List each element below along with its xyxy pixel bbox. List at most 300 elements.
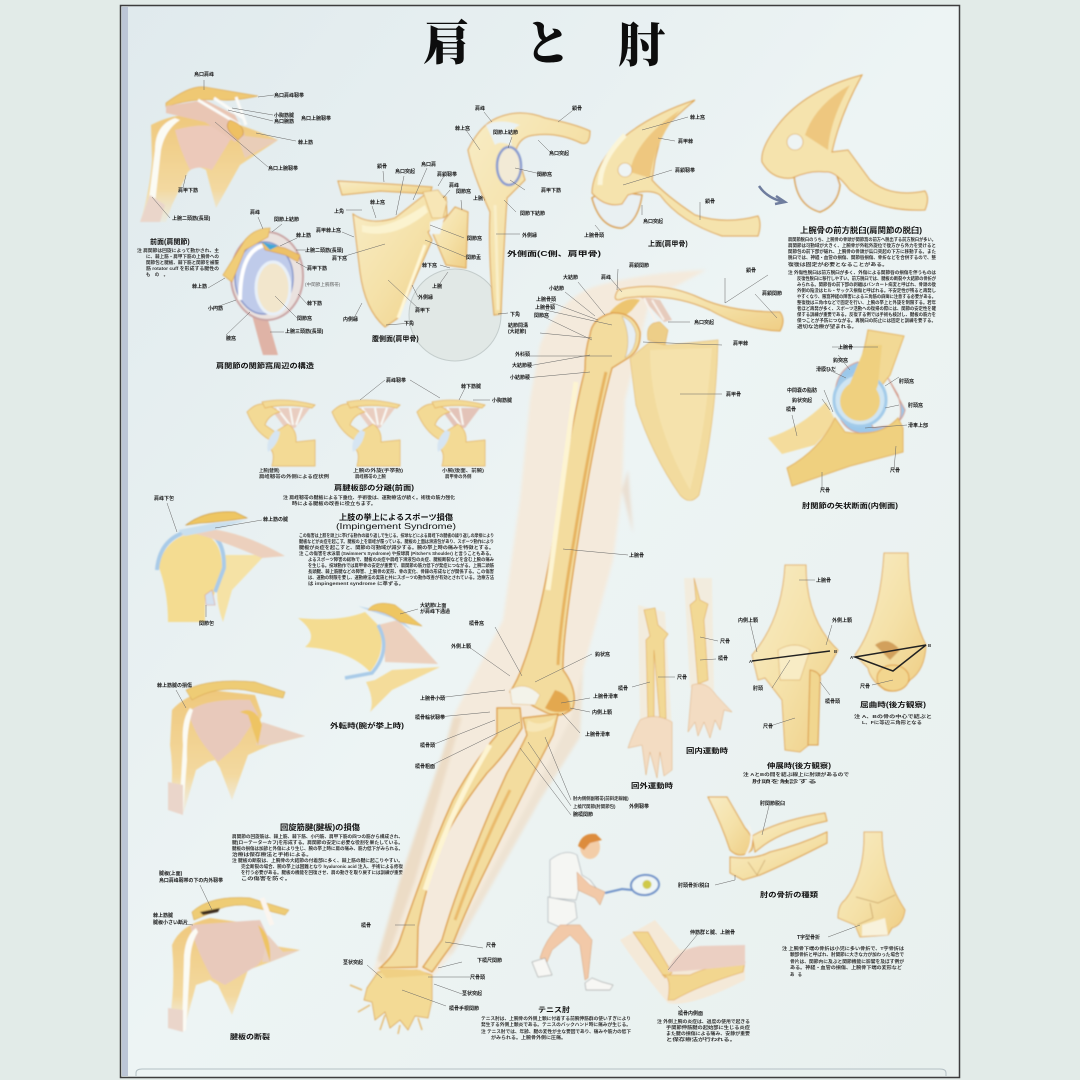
labels: 内側縁 — [343, 316, 358, 323]
leaders — [167, 503, 262, 617]
title: と — [524, 19, 571, 71]
paragraph: やすくなり、腋窩神経の障害による三角筋の麻痺に注意する必要がある。 — [797, 293, 936, 300]
paragraph: 腱板の損傷は加齢と外傷により生じ、腕の挙上時に肩の痛み、筋力低下がみられる。 — [232, 845, 403, 852]
labels: 外側靱帯 — [629, 803, 649, 810]
labels — [192, 209, 344, 342]
paragraph: 脱臼では、神経・血管の損傷、関節唇損傷、骨折などを合併するので、整 — [788, 254, 937, 261]
caption: 屈曲時(後方観察) — [860, 700, 926, 709]
note: 骨片は、関節内に及ぶと関節機能に影響を及ぼす例が — [790, 958, 905, 965]
forearm illustration — [628, 605, 672, 778]
paragraph: 長頭腱、棘上筋腱などの障害、上腕骨の変形、骨の変化、骨棘の形成などが関係する。この傷害 — [308, 568, 495, 575]
panel: tennis elbow — [620, 920, 751, 1043]
radius and ulna — [380, 708, 558, 972]
labels: 外側上顆 — [832, 617, 852, 624]
labels: 鎖骨 — [705, 198, 715, 205]
paragraph: 注 この傷害を水泳肩 (Swimmer's Syndrome) や投球肩 (Pitcher's Shoulder) と言うこともある。 — [299, 550, 494, 557]
note: ある — [790, 972, 802, 977]
paragraph: この傷害は上肢を頭上に挙げる動作の繰り返しで生じる。投球などによる肩峰下の腱板の繰り返しの摩擦により — [299, 532, 494, 539]
labels: 尺骨 — [820, 487, 830, 494]
labels: 肩鎖靱帯 — [437, 171, 457, 178]
labels — [153, 870, 223, 926]
labels — [172, 71, 331, 222]
labels: 尺骨 — [677, 674, 687, 681]
note: 注 AとBの間を結ぶ線上に肘頭があるので — [743, 771, 850, 778]
note — [657, 1018, 751, 1043]
labels: 内側上顆 — [592, 709, 612, 716]
labels: 肩峰靱帯の上腕 — [355, 473, 386, 480]
paragraph — [232, 833, 404, 882]
labels: 肩峰下包 — [154, 495, 174, 502]
leaders — [208, 217, 307, 335]
labels: 小胸筋腱 — [274, 112, 294, 119]
labels: 烏口上腕靱帯 — [268, 165, 298, 172]
subheading: (Impingement Syndrome) — [336, 522, 457, 531]
forearm illustration — [684, 578, 732, 738]
labels: 肩鎖関節 — [629, 262, 649, 269]
labels — [316, 161, 488, 327]
section illustration — [298, 603, 440, 712]
labels: 橈骨頭 — [420, 742, 435, 749]
paragraph: 注 外傷性脱臼は前方脱臼が多く、外傷による関節唇の損傷を伴うものは — [788, 269, 937, 276]
paragraph: 適切な治療が望まれる。 — [797, 323, 857, 330]
panel: main arm skeleton — [343, 262, 783, 1034]
labels: 棘上筋 — [192, 283, 207, 290]
panel: distal humerus fracture — [782, 832, 905, 977]
labels: 肩峰靱帯 — [386, 377, 406, 384]
labels: 腱板小さい断片 — [153, 919, 188, 926]
title: 肘 — [618, 21, 665, 73]
labels: 腋窩 — [226, 335, 236, 342]
labels: 肩甲骨の外側 — [445, 473, 472, 480]
labels: 橈骨 — [618, 685, 628, 692]
paragraph: よるスポーツ障害の総称で、腱板の炎症や肩峰下滑液包の炎症、腱板断裂などを含む上腕の痛み — [308, 556, 495, 563]
labels: A — [749, 659, 753, 664]
labels: 上腕骨頭 — [536, 296, 556, 303]
line — [752, 651, 830, 661]
note: 注 肩峰靱帯の腱板による下垂位、手術後は、運動療法が続く。術後の筋力強化 — [283, 494, 456, 501]
shoulder 2 — [332, 400, 400, 466]
note: と保存療法が行われる。 — [666, 1036, 736, 1043]
humerus illustration — [838, 832, 905, 937]
clavicle — [615, 286, 783, 331]
elbow illustration — [855, 553, 926, 691]
panel: elbow posterior extended — [738, 565, 852, 785]
panel: supination forearm — [618, 605, 687, 790]
labels: 烏口肩峰靱帯の下の内外靱帯 — [159, 877, 223, 884]
panel: shoulder section — [154, 495, 288, 627]
leaders — [360, 380, 490, 400]
leaders — [367, 269, 777, 1006]
labels: 上腕骨頸 — [535, 304, 555, 311]
lateral scapula illustration — [468, 113, 590, 315]
labels: 外側縁 — [418, 294, 433, 301]
note: 肘頭を触診する — [752, 778, 817, 785]
labels: 烏口腕筋 — [274, 118, 294, 125]
translucent circle — [409, 269, 501, 361]
panel: elbow sagittal section — [768, 330, 928, 510]
labels: 棘下筋腱 — [461, 383, 481, 390]
arm silhouette — [372, 270, 706, 980]
labels: 橈骨手根関節 — [449, 1005, 479, 1012]
note: 時による腱板の改善に役立ちます。 — [292, 500, 376, 507]
labels: 肩峰 — [250, 209, 260, 216]
labels: 下角 — [404, 320, 414, 327]
leaders — [750, 580, 832, 726]
labels: 小結節 — [549, 285, 564, 292]
labels: 肘内側側副靱帯(前斜走線維) — [573, 795, 629, 802]
labels: 上腕二頭筋(長頭) — [305, 247, 344, 254]
labels: A — [850, 655, 854, 660]
labels: 上腕骨 — [838, 344, 853, 351]
leaders — [668, 935, 697, 1010]
label: T字型骨折 — [797, 934, 820, 941]
note: 注 外側上腕の炎症は、過度の使用で起きる — [657, 1018, 750, 1025]
labels: 棘上筋の腱 — [263, 516, 288, 523]
labels: 肘頭骨折/脱臼 — [678, 882, 709, 889]
labels: 上腕骨 — [816, 577, 831, 584]
paragraph: 外側の陥没はヒル・サックス損傷と呼ばれる。不安定性が残ると再発し — [797, 287, 937, 294]
panel: scapula anterior view — [316, 161, 488, 343]
labels: 肩峰靱帯の外側による症状例 — [259, 473, 330, 480]
panel: shoulder front view — [137, 71, 331, 278]
labels: 烏口上腕靱帯 — [301, 115, 331, 122]
labels: 肘頭 — [753, 685, 763, 692]
labels: 烏口肩 — [421, 161, 436, 168]
caption: 上面(肩甲骨) — [648, 239, 688, 248]
labels: 下橈尺関節 — [477, 957, 502, 964]
labels: 烏口肩峰 — [194, 71, 214, 78]
labels: 関節上結節 — [274, 216, 299, 223]
paragraph: 腱板が炎症を起こすと、関節の可動域が減少する。腕の挙上時の痛みを特徴とする。 — [299, 544, 494, 551]
paragraph: 保つことが予防につながる。再脱臼の防止には固定と訓練を要する。 — [797, 317, 936, 324]
labels: 肩甲棘 — [678, 138, 693, 145]
labels: 肘関節脱臼 — [760, 800, 785, 807]
labels: 大結節/上面 — [420, 602, 446, 609]
labels: 腕橈関節 — [573, 811, 593, 818]
note: ある。神経・血管の損傷、上腕骨下端の変形など — [790, 964, 903, 971]
leaders — [595, 117, 700, 231]
labels: 伸筋群と腱、上腕骨 — [690, 929, 735, 936]
labels: 中間嚢の脂肪 — [787, 387, 817, 394]
elbow illustration — [708, 797, 827, 880]
paragraph: みられる。関節唇の前下部の剥離はバンカート病変と呼ばれ、骨頭の後 — [797, 281, 937, 288]
labels: 結節間溝 — [508, 322, 528, 329]
note: 注 上腕骨下端の骨折は小児に多い骨折で、T字骨折は — [782, 945, 905, 952]
illustration — [762, 75, 928, 212]
panel: shoulder mid left — [157, 681, 305, 815]
title — [423, 18, 665, 73]
panel: dislocated shoulder top view — [759, 75, 928, 212]
icon: arrow — [759, 186, 785, 204]
top view illustration — [592, 100, 760, 236]
labels: 棘上窩 — [690, 114, 705, 121]
labels: 茎状突起 — [462, 990, 482, 997]
shoulder illustration — [140, 87, 278, 222]
note: 注 A、Bの骨の中心で結ぶと — [854, 713, 932, 720]
paragraph: を生じる。投球動作では肩甲骨の安定が重要で、肩関節の筋力低下が発症につながる。上腕二頭筋 — [308, 562, 495, 569]
labels: 烏口肩峰靱帯 — [274, 92, 304, 99]
paragraph: 注 腱板の断裂は、上腕骨の大結節の付着部に多く、棘上筋の腱に起こりやすい。 — [232, 857, 403, 864]
labels: 肩甲下筋 — [541, 187, 561, 194]
labels — [259, 377, 512, 480]
caption: テニス肘 — [538, 1005, 570, 1014]
caption: 腹側面(肩甲骨) — [372, 334, 419, 343]
labels: 肘頭窩 — [908, 402, 923, 409]
paragraph: 反復性脱臼に移行しやすい。前方脱臼では、腱板の断裂や大結節の骨折が — [797, 275, 937, 282]
labels: 肩下窩 — [332, 255, 347, 262]
labels: 小結節稜 — [510, 374, 530, 381]
labels: 肩甲棘 — [733, 340, 748, 347]
labels: 橈骨 — [361, 922, 371, 929]
labels — [584, 114, 715, 239]
labels: 肩甲骨 — [726, 391, 741, 398]
labels: 尺骨 — [860, 683, 870, 690]
labels — [678, 800, 785, 889]
caption: 外転時(腕が挙上時) — [330, 721, 404, 730]
labels — [678, 929, 735, 1017]
glenoid illustration — [223, 228, 303, 355]
labels: 棘上窩 — [455, 125, 470, 132]
note: また腱の損傷による痛み、安静が重要 — [666, 1030, 751, 1037]
labels: 肩甲下 — [415, 308, 430, 314]
labels: 上腕骨 — [473, 195, 488, 202]
title: 肩 — [423, 18, 470, 71]
labels: 内側上顆 — [738, 617, 758, 624]
note: 関節包と腱板、棘下筋と関節を被覆 — [146, 259, 220, 266]
panel: scapula lateral view — [455, 105, 601, 318]
labels: 関節上結節 — [493, 129, 518, 136]
leader — [828, 925, 860, 937]
caption: 肩関節の関節窩周辺の構造 — [216, 361, 314, 370]
paragraph: は impingement syndrome に準ずる。 — [308, 580, 404, 587]
labels: 橈骨輪状靱帯 — [415, 714, 445, 721]
labels: 上腕二頭筋(長頭) — [172, 215, 211, 222]
paragraph: 復後は固定が必要となることがある。 — [788, 261, 888, 268]
note: もの。 — [146, 271, 168, 278]
wrist and carpals — [350, 968, 432, 1034]
labels: 肩甲下筋 — [307, 265, 327, 272]
icon: tennis player — [532, 834, 660, 990]
labels: 烏口突起 — [549, 150, 569, 157]
paragraph: この傷害を防ぐ。 — [241, 875, 291, 882]
labels: 関節包 — [199, 620, 214, 627]
section illustration — [768, 330, 905, 486]
labels: 上腕骨滑車 — [593, 693, 618, 700]
labels: 鈎突窩 — [833, 357, 848, 364]
labels: 肩峰 — [475, 105, 485, 112]
note: 筋 rotator cuff を形成する腱性の — [146, 265, 220, 272]
caption: 肘の骨折の種類 — [760, 890, 818, 899]
note: L、Fに等辺三角形となる — [862, 719, 922, 726]
labels: が肩峰下通過 — [420, 608, 450, 615]
labels: 大結節 — [563, 274, 578, 281]
paragraph: 腱板などが炎症を起こす。腱板の上を肩峰が覆っている。腱板の上面は滑液包があり、スポーツ動作により — [299, 538, 494, 545]
labels: 関節窩 — [534, 312, 549, 319]
labels: 棘上窩 — [370, 199, 385, 206]
labels: 滑車上部 — [908, 422, 928, 429]
panel: three shoulder diagrams — [247, 377, 512, 507]
shoulder 1 — [247, 400, 315, 466]
paragraph: 肩関節脱臼のうち、上腕骨の骨頭が関節窩の前方へ脱出する前方脱臼が多い。 — [788, 236, 936, 243]
labels: B — [928, 643, 931, 648]
panel: elbow fracture — [678, 797, 827, 899]
labels: 肩甲下筋 — [178, 187, 198, 194]
labels: 外科頸 — [515, 351, 530, 358]
panel: elbow posterior flexed — [850, 553, 932, 726]
text block: impingement syndrome — [299, 512, 495, 587]
labels: 橈骨 — [718, 655, 728, 662]
labels: 尺骨 — [720, 638, 730, 645]
labels: 上腕(健側) — [259, 467, 280, 474]
scapula illustration — [338, 181, 468, 327]
illustration — [168, 898, 300, 1032]
labels: 小円筋 — [208, 305, 223, 312]
labels: 烏口突起 — [395, 168, 415, 175]
labels: 橈骨内側面 — [678, 1010, 703, 1017]
labels: 外側縁 — [522, 232, 537, 239]
labels: 関節下結節 — [520, 210, 545, 217]
labels: 烏口突起 — [643, 218, 663, 225]
labels — [420, 602, 450, 615]
labels: 上腕骨 — [629, 552, 644, 559]
paragraph — [788, 236, 937, 330]
labels: 棘上筋 — [298, 139, 313, 146]
labels: 肩鎖関節 — [762, 290, 782, 297]
heading: 上腕骨の前方脱臼(肩関節の脱臼) — [800, 225, 922, 235]
caption: 肘関節の矢状断面(内側面) — [802, 501, 898, 510]
paragraph — [299, 532, 495, 587]
paragraph: 保する訓練が重要である。反復する例では手術も検討し、腱板の筋力を — [797, 311, 936, 318]
leaders — [152, 80, 296, 218]
labels: 腱板(上面) — [159, 870, 183, 877]
leaders — [792, 347, 907, 490]
labels: 尺骨 — [486, 942, 496, 949]
leaders — [466, 111, 572, 314]
caption: 伸展時(後方観察) — [767, 761, 831, 770]
paragraph: は、運動の制限を要し、運動療法の実施と共にスポーツの動作改善が有効とされている。治療方法 — [308, 574, 495, 581]
leaders — [400, 609, 418, 614]
labels: 関節窩 — [297, 315, 312, 322]
scapula — [610, 296, 718, 500]
leaders — [175, 885, 212, 925]
labels: 肩鎖靱帯 — [675, 167, 695, 174]
note: テニス肘は、上腕骨の外側上顆に付着する前腕伸筋群の使いすぎにより — [481, 1015, 631, 1022]
labels: 鎖骨 — [377, 163, 387, 170]
leader — [176, 690, 186, 708]
labels: 上腕骨滑車 — [585, 731, 610, 738]
labels: 棘下筋 — [307, 300, 322, 307]
caption: 回外運動時 — [631, 781, 673, 790]
labels: 関節窩 — [456, 188, 471, 195]
labels: 茎状突起 — [343, 959, 363, 966]
labels: 小胸筋腱 — [492, 397, 512, 404]
labels: B — [834, 649, 837, 654]
triangle lines — [855, 645, 926, 671]
illustration — [168, 681, 305, 815]
labels: 棘上筋腱 — [153, 912, 173, 919]
note: 発生する外側上顆炎である。テニスのバックハンド時に痛みが生じる。 — [481, 1021, 631, 1028]
note — [743, 771, 850, 785]
leaders — [700, 637, 718, 660]
text block: rotator cuff — [232, 822, 404, 882]
paragraph: 完全断裂の場合、腕の挙上は困難となり hyaluronic acid 注入、手術による修復 — [241, 863, 404, 870]
leaders — [342, 168, 466, 325]
labels: 棘上筋 — [296, 232, 311, 239]
labels — [618, 674, 687, 692]
paragraph: 整復後は三角巾などで固定を行い、上腕の挙上と外旋を制限する。若年 — [797, 299, 937, 306]
labels: 鈎状突起 — [792, 397, 812, 404]
paragraph: 肩関節は可動域が大きく、上腕骨が外転外旋位で後方から外力を受けると — [788, 242, 936, 249]
elbow illustration — [752, 565, 838, 752]
labels: 橈骨窩 — [469, 620, 484, 627]
labels — [343, 262, 782, 1012]
humerus — [510, 313, 640, 715]
panel: scapula top view — [584, 100, 760, 248]
labels: 棘下窩 — [422, 262, 437, 269]
labels: (中関節上腕靱帯) — [305, 281, 341, 288]
note: 注 テニス肘では、年齢、腱の変性が主な要因であり、痛みや筋力の低下 — [481, 1028, 632, 1035]
labels — [850, 643, 931, 690]
labels — [154, 495, 288, 627]
labels: 下角 — [510, 311, 520, 318]
labels: 橈骨頭 — [825, 698, 840, 705]
labels: 小腕(後面、前腕) — [442, 467, 485, 474]
paragraph: を行う必要がある。腱板の機能を回復させ、肩の動きを取り戻すには訓練が重要 — [241, 869, 404, 876]
note: 注 肩関節は回旋によって動かされ、主 — [137, 247, 220, 254]
labels: 大結節稜 — [512, 362, 532, 369]
shoulder 3 — [417, 400, 485, 466]
note — [137, 247, 220, 278]
leaders — [872, 680, 893, 685]
labels: 尺骨 — [890, 467, 900, 474]
labels: 尺骨 — [763, 723, 773, 730]
paragraph: 治療は保存療法と手術による。 — [232, 851, 312, 858]
note — [854, 713, 932, 726]
labels: 上腕骨頭 — [584, 232, 604, 239]
panel: pronation forearm — [684, 578, 732, 755]
note: 手関節伸筋腱の起始部に生じる炎症 — [666, 1024, 751, 1031]
labels: 上腕 — [432, 283, 442, 290]
note — [283, 494, 456, 507]
caption: 腱板の断裂 — [230, 1032, 270, 1041]
labels: 肩峰 — [601, 274, 611, 281]
labels: 烏口突起 — [694, 319, 714, 326]
elbow illustration — [620, 920, 745, 1004]
labels: 関節窩 — [467, 235, 482, 242]
paragraph: 腱(ローテーターカフ)を形成する。肩関節の安定に必要な役割を果たしている。 — [232, 839, 403, 846]
labels: 上腕の外旋(手挙動) — [353, 467, 404, 474]
panel: abducted shoulder section — [298, 602, 450, 730]
labels: 関節窩 — [537, 171, 552, 178]
labels: 上腕骨小頭 — [420, 695, 445, 702]
leaders — [632, 677, 675, 687]
labels: 肩峰 — [449, 182, 459, 189]
labels: 上腕三頭筋(長頭) — [285, 328, 324, 335]
text block: dislocation — [788, 225, 937, 330]
labels: (大結節) — [508, 328, 527, 335]
labels: 鈎状窩 — [595, 651, 610, 658]
labels: 肘頭窩 — [899, 378, 914, 385]
labels — [718, 638, 730, 662]
labels: 鎖骨 — [572, 105, 582, 112]
panel: rotator cuff tear — [153, 870, 300, 1041]
note: に、棘上筋・肩甲下筋の上腕骨への — [146, 253, 220, 260]
panel: tennis player — [481, 834, 660, 1041]
labels: 上角 — [334, 208, 344, 215]
note — [782, 945, 905, 977]
labels: 滑膜ひだ — [816, 366, 836, 373]
panel: glenoid cavity — [192, 209, 344, 370]
